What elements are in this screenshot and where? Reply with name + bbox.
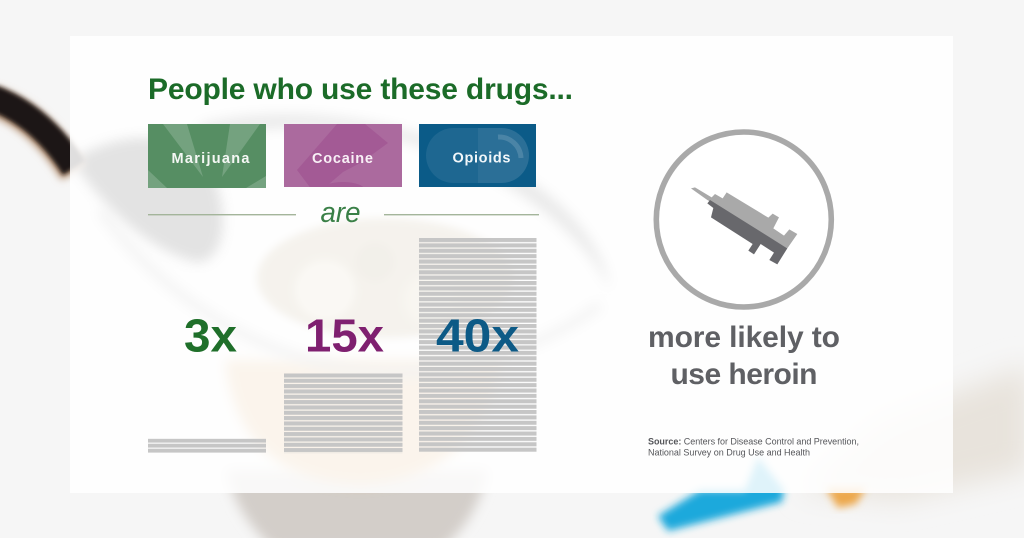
source note <box>648 436 859 458</box>
drug label: Marijuana: Marijuana <box>172 151 250 167</box>
striped bar: opioids 40 units <box>419 238 536 453</box>
source note: Source: Centers for Disease Control and Prevention, <box>648 436 859 446</box>
icon: razor blade <box>297 124 388 187</box>
icon: syringe in circle <box>656 132 831 307</box>
drug label: Cocaine <box>284 124 402 187</box>
stat: 3x: 3x <box>184 310 237 362</box>
drug label: Opioids <box>419 124 536 187</box>
cup <box>226 470 488 538</box>
spoon dark hollow <box>72 138 223 262</box>
striped bar: marijuana 3 units <box>148 439 266 454</box>
stat: 15x: 15x <box>305 310 384 362</box>
stat: 40x: 40x <box>436 310 519 362</box>
striped bar: cocaine 15 units <box>284 373 402 453</box>
syringe needle hub <box>658 457 784 531</box>
caption: more likely to use heroin: use heroin <box>670 358 818 391</box>
spoon bowl rim <box>200 114 610 290</box>
syringe body <box>800 365 1024 500</box>
spoon handle <box>0 100 74 172</box>
drug label: Opioids: Opioids <box>452 150 510 166</box>
divider with word "are": are <box>320 197 360 229</box>
caption: more likely to use heroin <box>648 321 840 391</box>
drug label: Marijuana <box>148 124 266 188</box>
white translucent panel <box>70 36 953 493</box>
title: People who use these drugs... <box>148 73 573 106</box>
spoon contents <box>257 218 513 338</box>
icon: capsule <box>426 128 529 183</box>
source note: National Survey on Drug Use and Health <box>648 448 810 458</box>
caption: more likely to use heroin: more likely to <box>648 321 840 354</box>
icon: cannabis leaf <box>148 124 266 188</box>
drug label: Cocaine: Cocaine <box>312 151 373 167</box>
